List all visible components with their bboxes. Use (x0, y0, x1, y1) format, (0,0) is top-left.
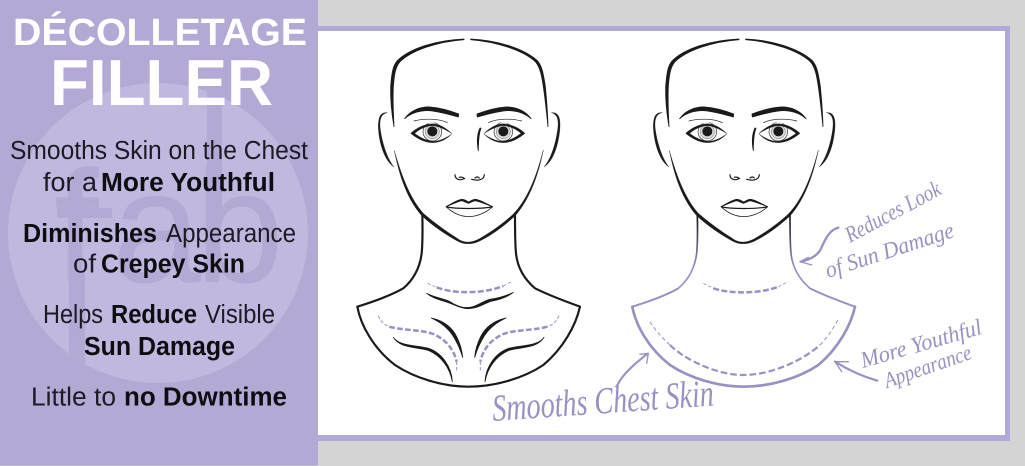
text block: more youthful: More Youthful (101, 169, 275, 197)
text block: downtime: Little to (31, 384, 116, 412)
logo watermark: fab in circle (8, 83, 308, 390)
title: DÉCOLLETAGE (13, 10, 307, 54)
text block: downtime: no Downtime (124, 384, 287, 412)
arrow: more youthful (835, 362, 877, 381)
logo watermark: fab in circle: b (195, 137, 284, 316)
face: before (378, 39, 560, 244)
label: reduces look: Reduces Look (840, 176, 946, 248)
label: smooths chest skin: Smooths Chest Skin (491, 373, 715, 430)
title: FILLER (50, 46, 273, 119)
frame: purple border around white drawing area (318, 26, 1010, 441)
neck and chest: before (357, 215, 580, 387)
face: after (653, 39, 835, 244)
logo watermark: fab in circle: a (112, 137, 201, 316)
label: appearance: Appearance (879, 339, 975, 393)
neck and chest: after (632, 215, 855, 387)
arrow: reduces look (800, 228, 838, 265)
logo watermark: fab in circle: f (54, 137, 99, 316)
illustration: after face and chest (491, 39, 985, 430)
label: more youthful: More Youthful (857, 314, 985, 373)
text block: helps reduce: Visible (205, 301, 275, 329)
label: of sun damage: of Sun Damage (822, 218, 957, 283)
panel: left purple benefits panel (0, 0, 318, 466)
text block: helps reduce: Helps (43, 301, 103, 329)
title (13, 10, 307, 119)
text block: more youthful: for a (43, 169, 98, 197)
text block: helps reduce: Reduce (111, 301, 197, 329)
text block: crepey skin: Crepey Skin (101, 250, 245, 278)
text block: smooths skin: Smooths Skin on the Chest (10, 137, 308, 165)
arrow: smooths chest skin (617, 353, 648, 387)
text block: diminishes: Diminishes (23, 220, 157, 248)
text block: crepey skin: of (73, 250, 97, 278)
illustration: before face and chest (357, 39, 580, 387)
text block: sun damage: Sun Damage (84, 333, 235, 361)
text block: diminishes: Appearance (166, 220, 296, 248)
